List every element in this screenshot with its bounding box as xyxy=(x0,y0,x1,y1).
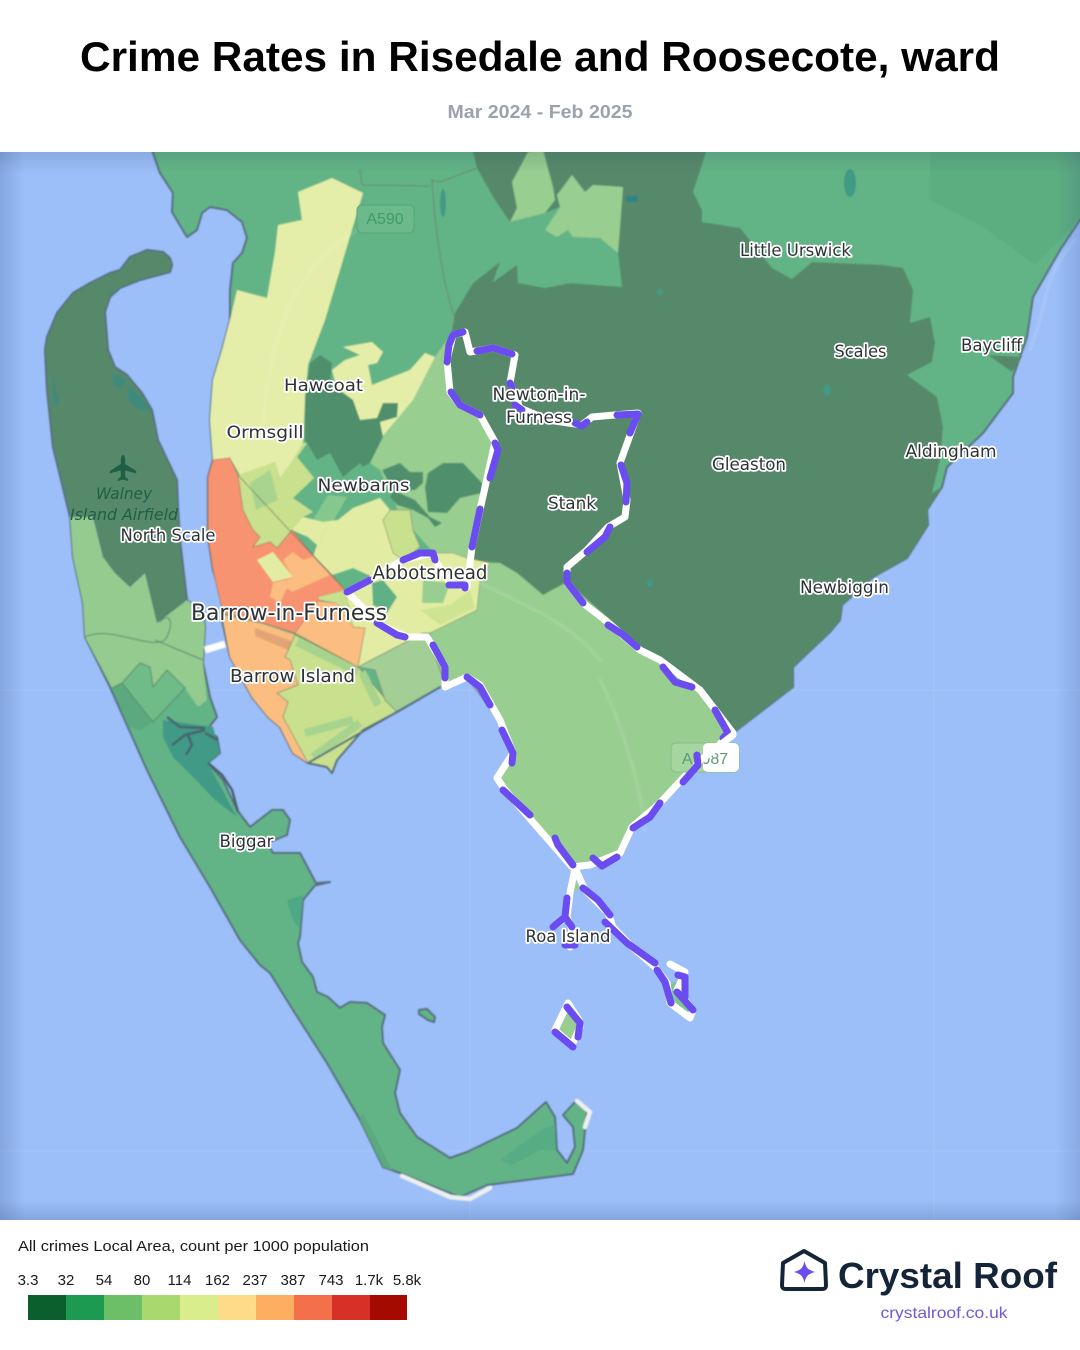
region: Walney central light green xyxy=(70,517,207,707)
road badge: A5087: A5087 xyxy=(682,751,728,768)
map place labels: North Scale xyxy=(120,526,216,546)
region: Newbarns light green xyxy=(370,340,497,560)
map place labels: Biggar xyxy=(220,832,274,852)
region: Abbotsmead light green block xyxy=(422,580,450,603)
region: Walney central medium green xyxy=(122,663,185,722)
region: Newbarns medium green xyxy=(344,463,362,476)
map place labels: Newbarns xyxy=(318,476,410,496)
ward boundary: white underlay xyxy=(347,332,733,1045)
region: Barrow right green-yellow block xyxy=(318,590,353,627)
legend values xyxy=(18,1272,422,1289)
region: railway sidings xyxy=(255,628,292,650)
region: Walney outline xyxy=(45,250,587,1197)
road badge: A590: A590 xyxy=(366,211,404,228)
legend xyxy=(18,1238,422,1320)
region: Hawcoat dark green xyxy=(305,355,482,527)
map place labels: Scales xyxy=(834,342,887,362)
legend title: All crimes Local Area, count per 1000 population xyxy=(18,1238,369,1255)
region: Barrow west orange strip xyxy=(222,615,308,763)
region: Walney north dark green xyxy=(45,250,187,623)
region: Abbotsmead yellow xyxy=(345,553,490,667)
region: Barrow inner orange xyxy=(270,552,330,603)
region: Walney marsh creeks xyxy=(167,717,238,812)
region: Roosecote light green xyxy=(358,640,442,712)
legend values: 162 xyxy=(205,1272,230,1289)
map place labels: Furness xyxy=(506,408,572,428)
region: Hawcoat yellow xyxy=(332,342,435,437)
icon: airplane xyxy=(110,455,136,481)
map place labels: Barrow-in-Furness xyxy=(191,601,387,626)
subtitle: date range: Mar 2024 - Feb 2025 xyxy=(448,101,632,122)
island: Roa xyxy=(572,880,582,893)
icon: house with star xyxy=(782,1251,826,1289)
region: Abbotsmead medium green block xyxy=(372,580,397,613)
legend values: 114 xyxy=(168,1272,191,1289)
region: Barrow right orange ward xyxy=(295,601,365,667)
map place labels: Aldingham xyxy=(906,442,996,462)
legend values: 1.7k xyxy=(355,1272,384,1289)
map place labels: Barrow Island xyxy=(230,666,355,687)
region: Ormsgill yellow ward xyxy=(210,178,363,478)
region: Barrow Island darker bands xyxy=(297,642,378,757)
region: yellow-green central blocks xyxy=(383,510,420,560)
region: Baycliff dark patch xyxy=(988,355,1022,372)
map place labels: Newton-in- xyxy=(492,385,586,405)
island: Foulney xyxy=(668,978,690,1014)
region: western park patch xyxy=(250,470,278,510)
map place labels: Roa Island xyxy=(526,927,610,947)
legend values: 237 xyxy=(242,1272,268,1289)
region: darker coastal fringe, north east xyxy=(930,140,1080,265)
wordmark: Crystal Roof xyxy=(838,1255,1058,1296)
region: Barrow Island green-yellow ward xyxy=(277,635,397,773)
island: Piel xyxy=(558,1006,579,1044)
ward boundary: purple dashes xyxy=(347,332,728,1047)
title: Crime Rates in Risedale and Roosecote, ward xyxy=(80,33,1000,80)
region: Barrow red-orange ward xyxy=(208,458,345,633)
legend values: 80 xyxy=(134,1272,150,1289)
region: lakes xyxy=(440,169,856,587)
map place labels: Abbotsmead xyxy=(372,563,488,584)
legend values: 5.8k xyxy=(393,1272,422,1289)
road badge: A5087 xyxy=(671,735,739,782)
label: Walney Island Airfield xyxy=(70,484,179,524)
legend values: 54 xyxy=(96,1272,112,1289)
region: Walney beach xyxy=(402,1101,590,1199)
label: Walney Island Airfield: Walney xyxy=(96,484,152,503)
region: Newbarns lighter green xyxy=(314,494,347,522)
region: Risedale and Roosecote light green ward xyxy=(430,563,733,867)
region: light green patches north xyxy=(510,150,623,253)
website link: crystalroof.co.uk xyxy=(880,1305,1009,1322)
road badge: A590 xyxy=(357,205,414,233)
legend colour scale xyxy=(28,1295,407,1320)
legend values: 387 xyxy=(280,1272,306,1289)
region: Walney marsh patches xyxy=(52,372,152,412)
region: central yellow ward xyxy=(313,498,403,577)
label: Walney Island Airfield: Island Airfield xyxy=(70,505,179,524)
map place labels: Ormsgill xyxy=(226,423,304,443)
region: Walney south teal marsh xyxy=(163,720,237,817)
region: dark green rural wards xyxy=(445,140,943,733)
map place labels: Little Urswick xyxy=(740,241,851,261)
region: Walney internal boundaries xyxy=(85,618,203,722)
region: Walney teal lower xyxy=(287,895,303,930)
Walney Island xyxy=(45,250,590,1199)
region: central yellow block xyxy=(292,517,327,545)
region: western green-yellow ward xyxy=(238,443,314,548)
map place labels: Stank xyxy=(548,494,596,514)
region: mainland base xyxy=(150,152,1080,764)
map place labels: Hawcoat xyxy=(284,376,363,396)
region: Walney south-end teal flats xyxy=(500,1125,556,1165)
map edge shading xyxy=(0,152,1080,1220)
region: boundaries and roads xyxy=(238,168,1075,830)
map place labels xyxy=(120,241,1023,947)
region: Walney south-west strip xyxy=(112,683,153,730)
legend values: 743 xyxy=(318,1272,344,1289)
map place labels: Gleaston xyxy=(712,455,786,475)
region: Barrow inner yellow block xyxy=(257,552,293,582)
region: Abbotsmead green-yellow block xyxy=(420,590,475,625)
logo: Crystal Roof xyxy=(782,1251,1058,1322)
legend values: 3.3 xyxy=(18,1272,38,1289)
map shapes xyxy=(45,130,1080,1199)
map place labels: Newbiggin xyxy=(800,578,889,598)
bridge to Walney xyxy=(205,644,225,650)
island: small islet xyxy=(419,1009,435,1022)
map place labels: Baycliff xyxy=(961,336,1023,356)
legend values: 32 xyxy=(58,1272,74,1289)
